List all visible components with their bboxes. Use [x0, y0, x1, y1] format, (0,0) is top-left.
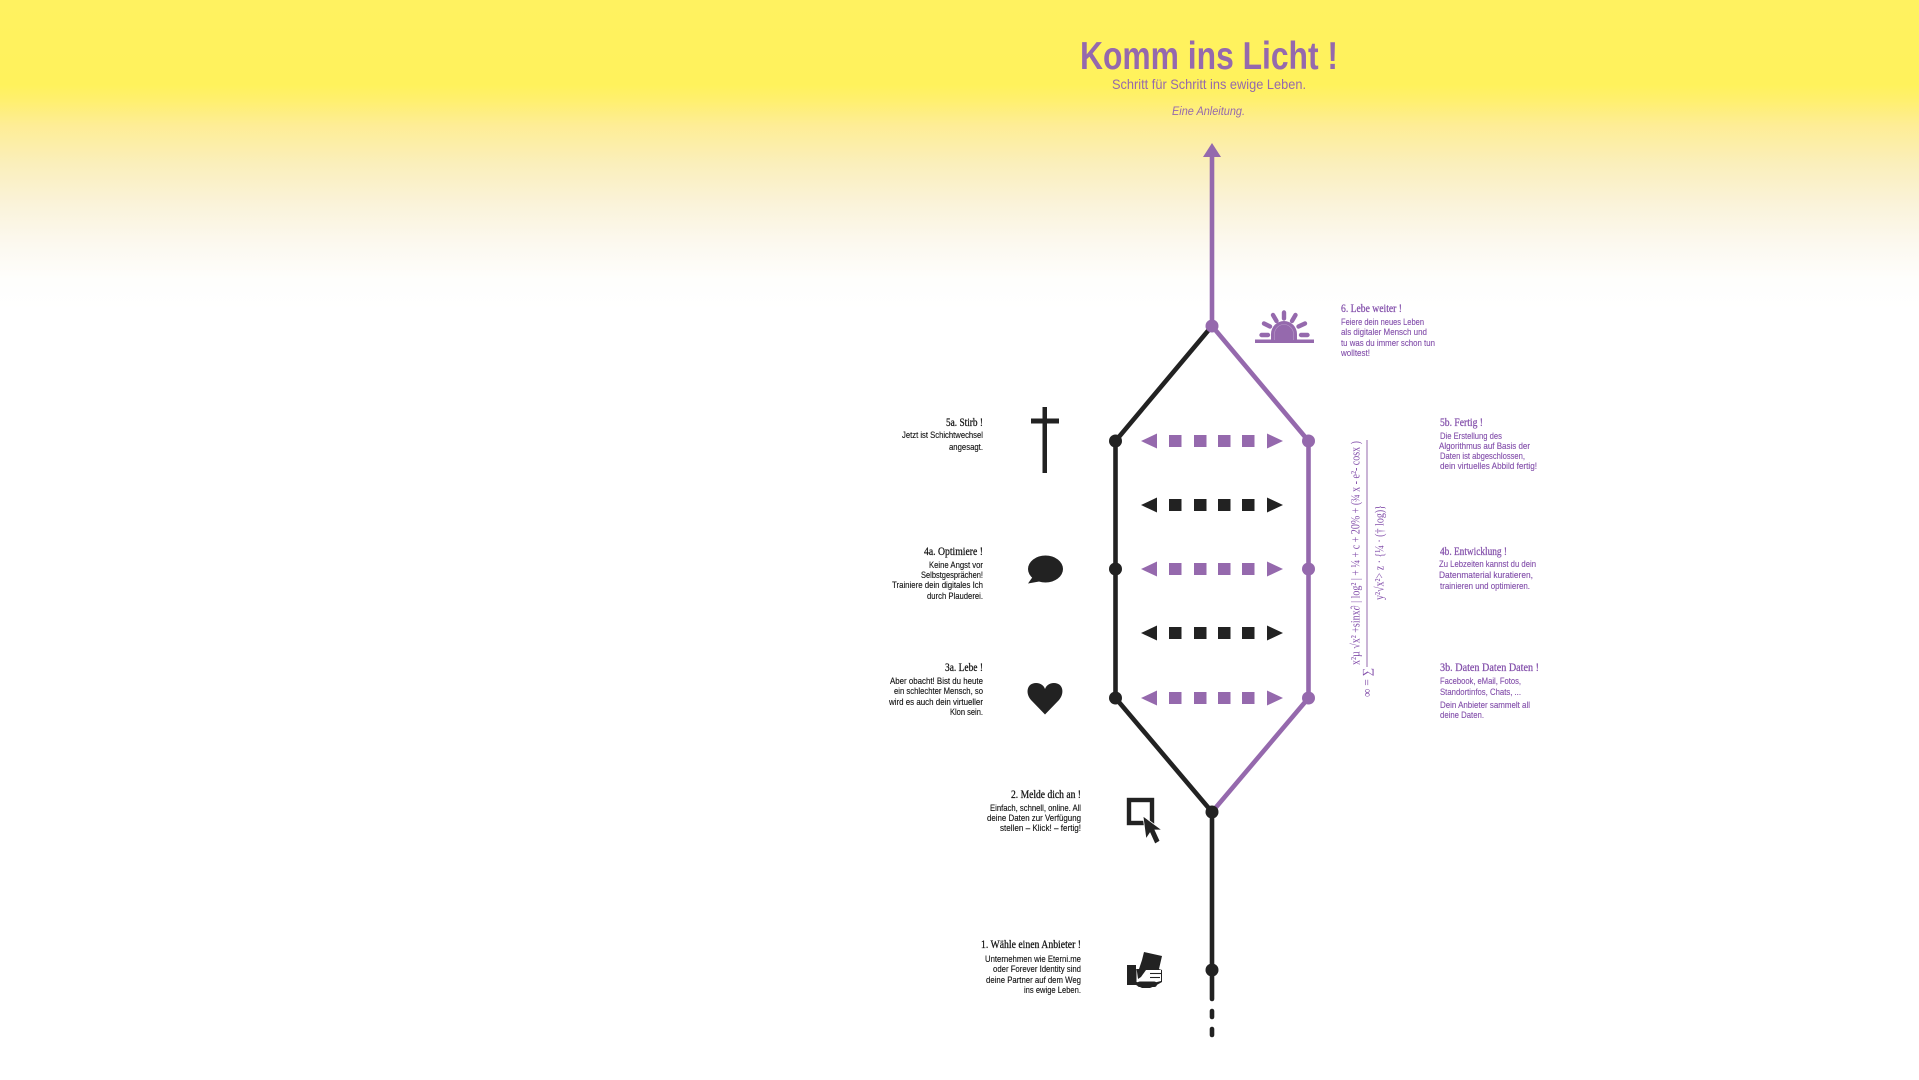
text: step 1: Unternehmen wie Eterni.me — [985, 954, 1081, 964]
text: step 4b: Datenmaterial kuratieren, — [1439, 570, 1533, 580]
text: step 5b: Die Erstellung des — [1440, 431, 1503, 441]
text: step 2: stellen – Klick! – fertig! — [1000, 823, 1081, 833]
purple path: digital branch — [1212, 326, 1308, 812]
text: step 1: 1. Wähle einen Anbieter ! — [981, 939, 1081, 951]
black path: dying branch — [1116, 326, 1212, 812]
text: step 1: deine Partner auf dem Weg — [986, 975, 1081, 985]
text: step 6: als digitaler Mensch und — [1341, 327, 1427, 337]
dashed arrow row 3 — [1141, 690, 1283, 706]
dashed arrow row black lower — [1141, 626, 1283, 640]
text: step 5b: Algorithmus auf Basis der — [1439, 441, 1530, 451]
text: step 4a: Keine Angst vor — [929, 560, 983, 570]
text: step 5b: 5b. Fertig ! — [1440, 417, 1483, 429]
dashed arrow row 5 — [1141, 434, 1283, 448]
black path: start line — [1210, 812, 1214, 1035]
text: step 3b: Facebook, eMail, Fotos, — [1440, 676, 1521, 686]
text: step 3b: 3b. Daten Daten Daten ! — [1440, 662, 1539, 674]
text: step 3a: wird es auch dein virtueller — [888, 697, 983, 707]
formula: x²µ √x² +sinx∂ | log² | + ¼ + c + 20% + (¾ x - e²- cosx ) — [1348, 441, 1362, 665]
text: step 6: 6. Lebe weiter ! — [1341, 303, 1402, 315]
text: step 5b: dein virtuelles Abbild fertig! — [1440, 461, 1537, 471]
text: step 3a: Aber obacht! Bist du heute — [890, 676, 983, 686]
text: step 3a: Klon sein. — [950, 707, 983, 717]
text: step 3b: deine Daten. — [1440, 710, 1484, 720]
text: step 2: Einfach, schnell, online. All — [990, 803, 1081, 813]
text: step 2: 2. Melde dich an ! — [1011, 789, 1081, 801]
text: step 1: oder Forever Identity sind — [993, 964, 1081, 974]
text: step 6 — [1340, 303, 1435, 358]
text: step 3a: 3a. Lebe ! — [945, 662, 983, 674]
dashed arrow row black upper — [1141, 498, 1283, 512]
path diagram — [1116, 143, 1308, 1035]
text: step 2: deine Daten zur Verfügung — [987, 813, 1081, 823]
text: step 3a — [888, 662, 983, 717]
formula: y²√x²> z · {¼ · († log)} — [1372, 505, 1386, 600]
text: step 5a: Jetzt ist Schichtwechsel — [902, 430, 983, 440]
text: step 4a: Trainiere dein digitales Ich — [892, 580, 983, 590]
text: step 5a: angesagt. — [949, 442, 983, 452]
text: step 3b — [1440, 662, 1539, 720]
tagline: Eine Anleitung. — [1172, 104, 1245, 118]
text: step 5a — [902, 417, 983, 452]
text: step 4a — [892, 546, 983, 601]
text: step 2 — [987, 789, 1081, 833]
text: step 5a: 5a. Stirb ! — [946, 417, 983, 429]
text: step 5b — [1439, 417, 1537, 471]
text: step 4a: durch Plauderei. — [927, 591, 983, 601]
text: step 3a: ein schlechter Mensch, so — [894, 686, 983, 696]
icon: click cursor — [1129, 800, 1162, 844]
text: step 4b: 4b. Entwicklung ! — [1440, 546, 1507, 558]
subtitle: Schritt für Schritt ins ewige Leben. — [1112, 76, 1306, 92]
text: step 6: tu was du immer schon tun — [1341, 338, 1435, 348]
title: Komm ins Licht ! — [1080, 35, 1338, 78]
text: step 6: Feiere dein neues Leben — [1341, 317, 1424, 327]
icon: cross — [1031, 407, 1059, 473]
text: step 4b: trainieren und optimieren. — [1440, 581, 1530, 591]
dashed arrow row 4 — [1141, 562, 1283, 576]
text: step 6: wolltest! — [1340, 348, 1370, 358]
text: step 3b: Standortinfos, Chats, ... — [1440, 687, 1521, 697]
text: step 4b: Zu Lebzeiten kannst du dein — [1439, 559, 1536, 569]
title block — [1080, 35, 1338, 118]
background gradient — [0, 0, 1919, 310]
text: step 4b — [1439, 546, 1536, 591]
icon: heart — [1028, 683, 1062, 714]
icon: sunrise — [1255, 312, 1314, 343]
text: step 4a: 4a. Optimiere ! — [924, 546, 983, 558]
text: step 1: ins ewige Leben. — [1024, 985, 1081, 995]
formula — [1348, 440, 1386, 697]
icon: handshake — [1127, 952, 1162, 988]
text: step 5b: Daten ist abgeschlossen, — [1440, 451, 1525, 461]
text: step 4a: Selbstgesprächen! — [921, 570, 983, 580]
formula: ∞ = ∑ — [1360, 668, 1374, 697]
text: step 1 — [981, 939, 1081, 995]
icon: speech bubble — [1028, 556, 1063, 584]
path nodes — [1109, 320, 1315, 976]
arrow: upward to the light — [1203, 143, 1221, 326]
text: step 3b: Dein Anbieter sammelt all — [1440, 700, 1530, 710]
